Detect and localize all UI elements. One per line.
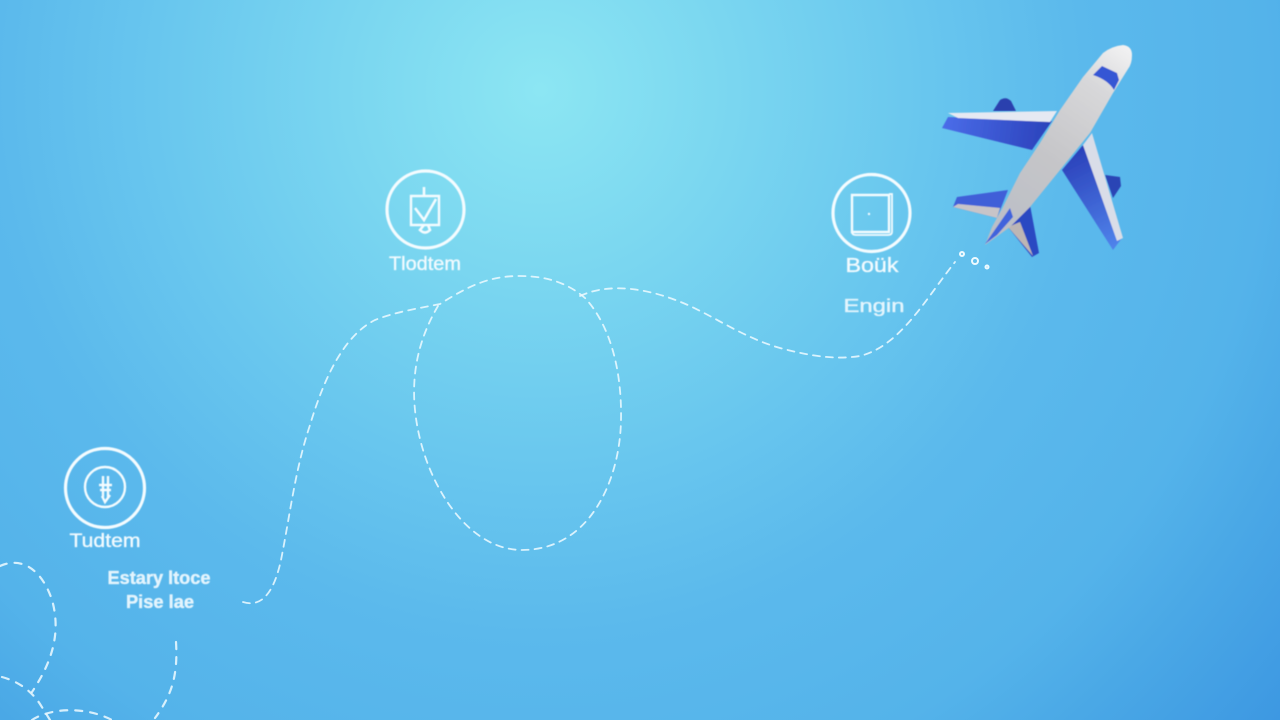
label: Tudtem — [70, 531, 140, 552]
icon: book — [833, 174, 910, 252]
caption: Engin — [844, 296, 904, 316]
caption: Pise lae — [126, 592, 194, 612]
icon: airplane — [942, 45, 1132, 257]
step: middle — [387, 171, 464, 275]
step: right — [833, 174, 910, 316]
icon: checklist — [387, 171, 464, 248]
caption: Estary ltoce — [108, 568, 210, 588]
dashed flight path: main route — [243, 262, 955, 603]
step: lower left — [66, 448, 210, 612]
caption — [108, 568, 210, 612]
dashed flight path: lower left loops — [0, 563, 176, 720]
label: Tlodtem — [389, 254, 461, 275]
exhaust dots behind plane — [960, 252, 988, 268]
icon: coin circle — [66, 448, 144, 528]
label: Boük — [846, 255, 900, 277]
